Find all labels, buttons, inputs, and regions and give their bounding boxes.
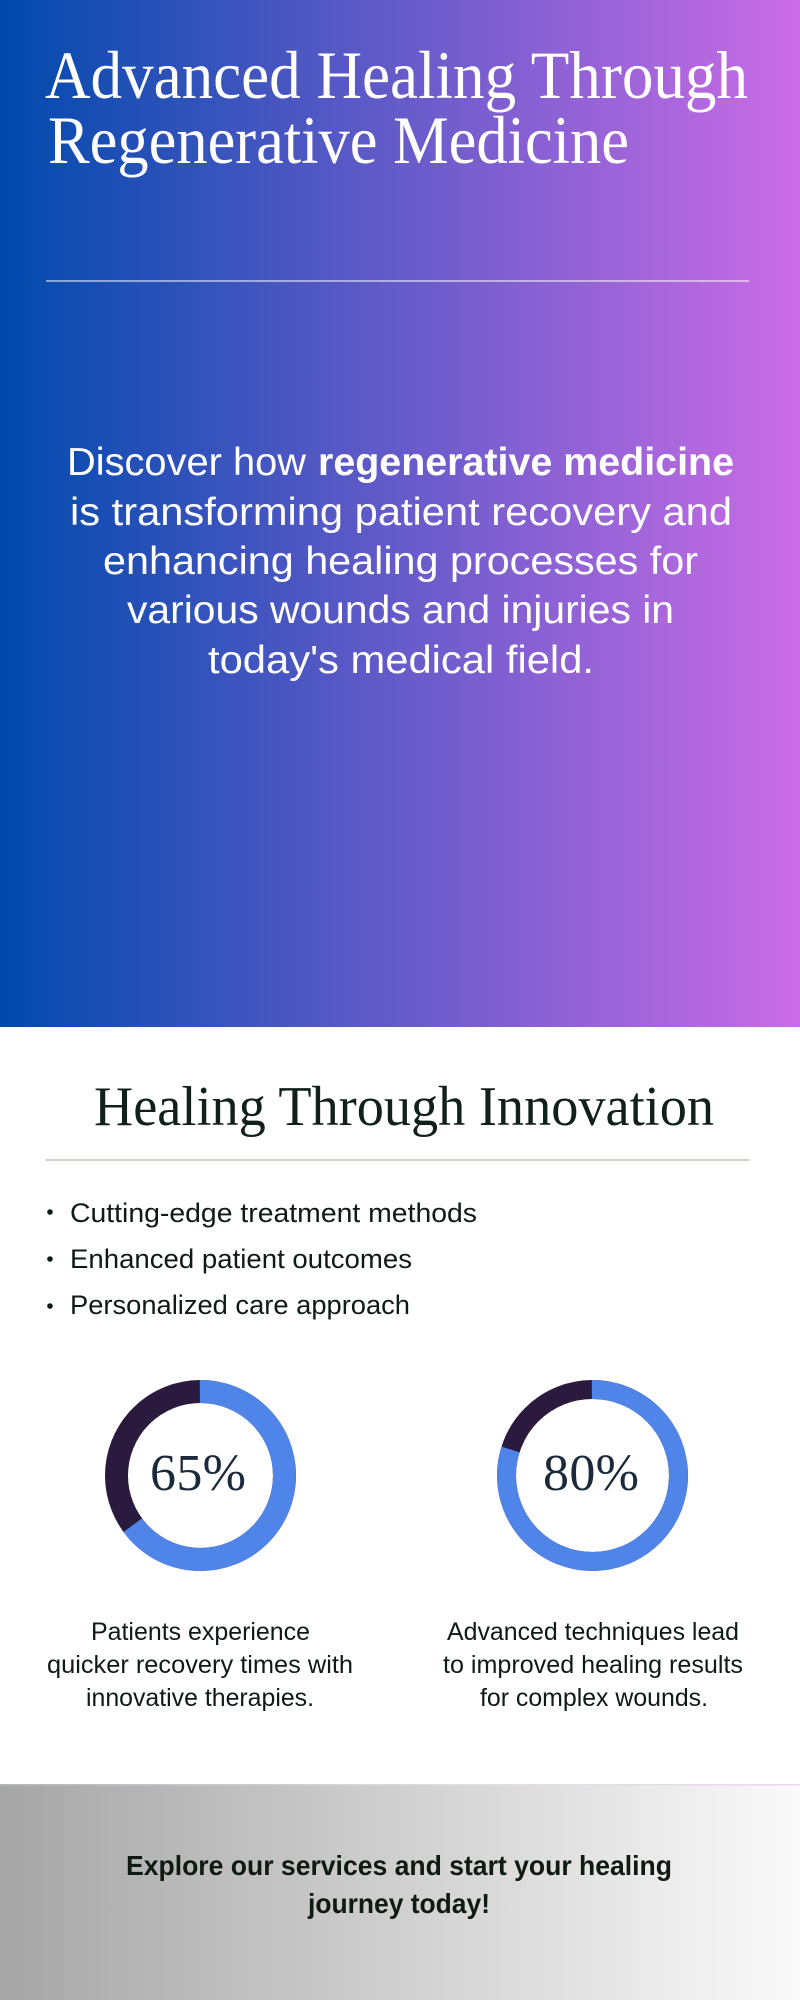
intro text: enhancing healing processes for bbox=[103, 540, 698, 583]
title: Regenerative Medicine bbox=[48, 102, 629, 178]
intro text bbox=[67, 441, 734, 682]
caption: 80% stat: Advanced techniques lead bbox=[447, 1618, 739, 1646]
caption: 65% stat bbox=[47, 1618, 353, 1712]
title: Advanced Healing Through bbox=[45, 37, 748, 113]
donut chart: 80%: 80% bbox=[543, 1445, 639, 1502]
bullet list: Cutting-edge treatment methods bbox=[70, 1198, 477, 1228]
intro text: Discover how bbox=[67, 441, 307, 484]
intro text: regenerative medicine bbox=[318, 441, 734, 484]
caption: 65% stat: innovative therapies. bbox=[86, 1684, 314, 1712]
donut chart: 65%: 65% bbox=[150, 1445, 246, 1502]
bullet list: Personalized care approach bbox=[70, 1290, 410, 1320]
call to action text bbox=[126, 1850, 672, 1919]
section heading: Healing Through Innovation bbox=[94, 1076, 714, 1138]
caption: 65% stat: Patients experience bbox=[91, 1618, 310, 1646]
caption: 80% stat bbox=[443, 1618, 743, 1712]
call to action text: Explore our services and start your healing bbox=[126, 1850, 672, 1881]
intro text: is transforming patient recovery and bbox=[70, 491, 732, 534]
caption: 80% stat: to improved healing results bbox=[443, 1651, 743, 1679]
caption: 80% stat: for complex wounds. bbox=[480, 1684, 708, 1712]
caption: 65% stat: quicker recovery times with bbox=[47, 1651, 353, 1679]
donut chart: 65% bbox=[116, 1392, 284, 1560]
panel: hero bbox=[0, 0, 800, 1027]
call to action text: journey today! bbox=[307, 1888, 490, 1919]
panel: call to action bbox=[0, 1784, 800, 2000]
intro text: today's medical field. bbox=[208, 639, 594, 682]
intro text: various wounds and injuries in bbox=[127, 589, 674, 632]
bullet list: Enhanced patient outcomes bbox=[70, 1244, 412, 1274]
title bbox=[45, 37, 748, 178]
panel: healing through innovation bbox=[46, 1076, 749, 1712]
bullet list bbox=[47, 1198, 477, 1320]
donut chart: 80% bbox=[506, 1390, 678, 1562]
